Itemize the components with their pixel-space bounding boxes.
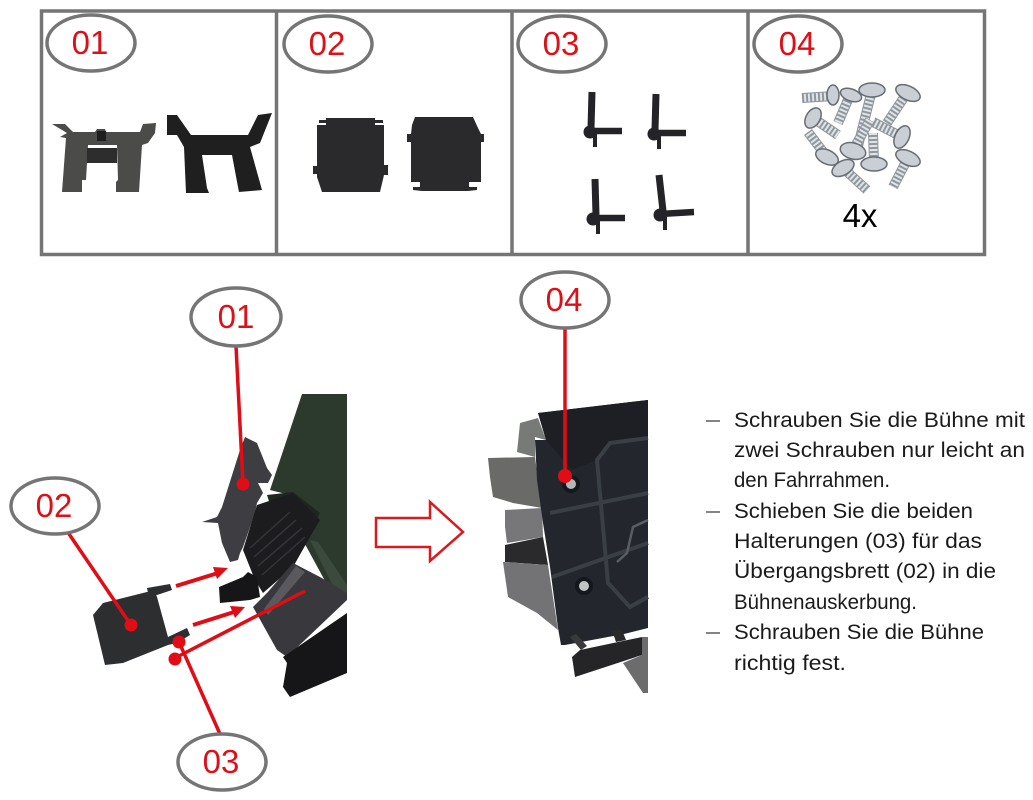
callout 03: 03: [203, 743, 239, 780]
step 1: Schrauben Sie die Bühne mit: [734, 409, 1025, 432]
black handle: [572, 637, 642, 677]
part 02: two transition boards: [313, 117, 484, 192]
step 2: Übergangsbrett (02) in die: [734, 560, 996, 583]
upper screw: [562, 475, 580, 493]
instructions text: [706, 409, 1025, 675]
step 3: Schrauben Sie die Bühne: [734, 621, 984, 644]
callout 04: 04: [546, 281, 582, 318]
callout 04: [521, 272, 609, 483]
green frame panel: [270, 394, 347, 600]
part 04: pile of screws: [801, 81, 923, 190]
top dark band: [538, 400, 648, 470]
badge 01: 01: [72, 24, 108, 61]
callout 02: [11, 478, 138, 632]
process arrow: [376, 502, 463, 561]
part 03: four holder pins: [584, 92, 694, 234]
link to handle: [570, 634, 587, 650]
badge 03: 03: [543, 25, 579, 62]
lower plate: [253, 563, 347, 657]
step 2: Halterungen (03) für das: [734, 530, 982, 553]
step 3: richtig fest.: [734, 652, 846, 675]
insertion arrow upper: [176, 567, 228, 586]
bracket plate: [202, 437, 272, 562]
left assembly photo: [93, 394, 347, 697]
badge 03: [518, 16, 606, 72]
badge 01: [47, 15, 135, 71]
badge 02: [284, 16, 372, 72]
step 3: [706, 621, 984, 675]
badge 04: [754, 16, 842, 72]
bottom black foot: [283, 613, 347, 697]
step 2: [706, 500, 996, 614]
quantity label: 4x: [843, 197, 878, 234]
step 1: zwei Schrauben nur leicht an: [734, 439, 1025, 462]
frame struts: [550, 438, 648, 607]
step 1: den Fahrrahmen.: [734, 469, 890, 492]
small black holder: [219, 572, 260, 603]
badge 04: 04: [779, 25, 815, 62]
lower screw: [575, 577, 593, 595]
part 01: two platform brackets: [52, 113, 272, 193]
badge 02: 02: [309, 25, 345, 62]
step 1: [706, 409, 1025, 492]
callout 01: 01: [218, 298, 254, 335]
callout 02: 02: [36, 487, 72, 524]
callout 03: [168, 591, 305, 790]
insertion arrow lower: [193, 606, 245, 625]
dark platform body: [535, 400, 648, 645]
black grille: [243, 493, 320, 593]
parts table: [42, 11, 984, 254]
right assembly photo: [488, 400, 648, 693]
transition board being inserted: [93, 584, 190, 665]
shadow on frame: [267, 492, 320, 540]
step 2: Bühnenauskerbung.: [734, 591, 917, 614]
gray back pieces: [488, 418, 648, 693]
callout 01: [191, 288, 281, 490]
step 2: Schieben Sie die beiden: [734, 500, 973, 523]
